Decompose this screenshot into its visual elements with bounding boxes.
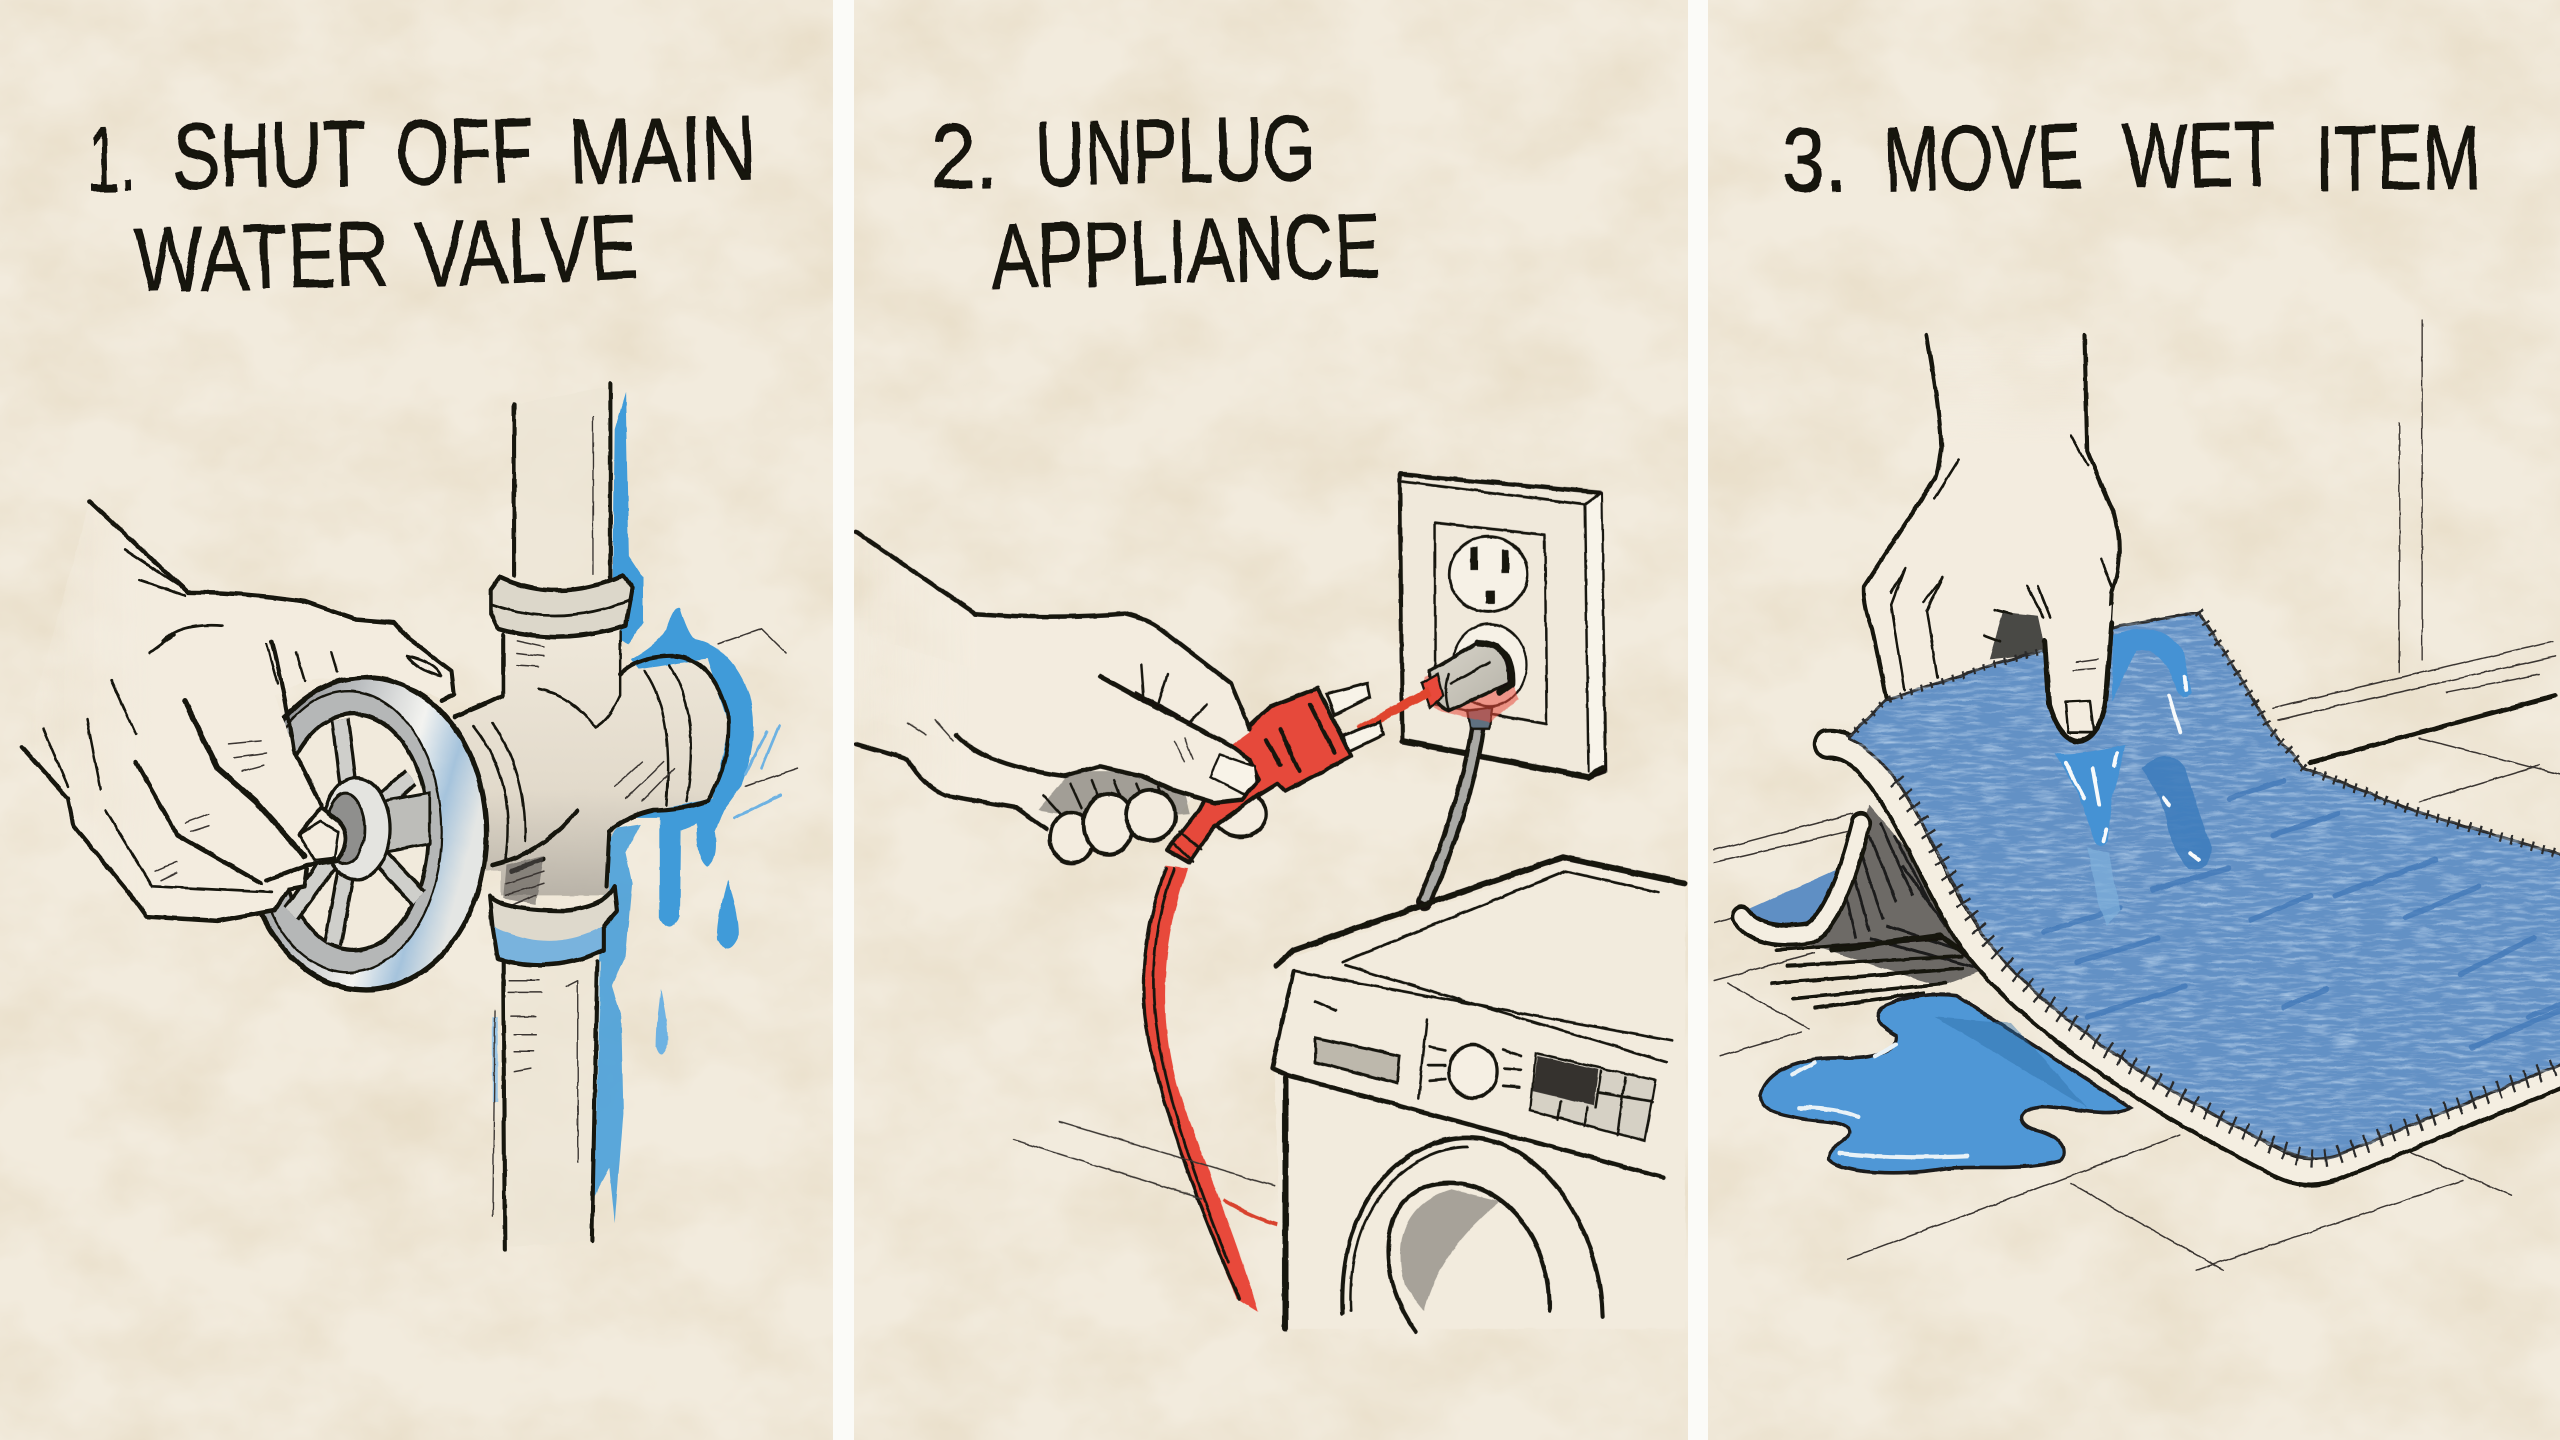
illustration: hand turning water valve wheel [22,383,798,1250]
title: step 1: WATER [133,203,389,312]
wall outlet [1400,474,1605,777]
title: step 1: 1. [87,108,136,211]
hand reaching down [1864,335,2120,699]
title: step 3: ITEM [2314,107,2481,210]
title: step 2 [931,97,1381,309]
title: step 3 [1781,103,2481,212]
top flange [491,575,632,637]
title: step 1: OFF [395,99,534,205]
title: step 3: MOVE [1883,106,2083,211]
hand gripping wheel [22,502,454,921]
illustration: hand lifting wet rug [1714,320,2560,1270]
title: step 2: APPLIANCE [989,195,1381,309]
small folded rug corner [1741,823,1989,971]
panel: step 2 unplug appliance [854,0,1688,1440]
underside of folded rug [1810,804,1978,986]
panel: step 1 shut off valve [0,0,833,1440]
title: step 1: VALVE [414,196,640,306]
title: step 3: 3. [1781,109,1847,212]
floor shadow hatching [1771,938,1962,1008]
title: step 1 [87,97,756,312]
water leak on pipe [492,392,781,1223]
title: step 2: 2. [931,105,998,208]
title: step 3: WET [2122,103,2277,208]
red plug and cable [1143,683,1383,1312]
title: step 1: MAIN [568,97,756,204]
title: step 1: SHUT [172,103,366,208]
puddle [1760,995,2131,1173]
finger pinching rug [2045,605,2112,741]
illustration: hand unplugging washer [856,474,1685,1332]
floor tile lines [1714,320,2560,1270]
title: step 2: UNPLUG [1035,97,1316,206]
washing machine [1272,857,1685,1332]
floor lines [1013,1121,1275,1198]
thumb and back of hand [856,532,1259,803]
wet blue rug [1827,612,2560,1171]
panel: step 3 move wet item [1708,0,2560,1440]
red cord thin section [1359,691,1430,730]
valve wheel [245,677,486,990]
main pipe and tee fitting [452,383,798,1250]
bottom flange [490,886,617,965]
water drips on rug [2055,629,2211,926]
appliance power cord and plug in socket [1421,643,1519,901]
hand palm and fingers behind plug [856,632,1266,863]
